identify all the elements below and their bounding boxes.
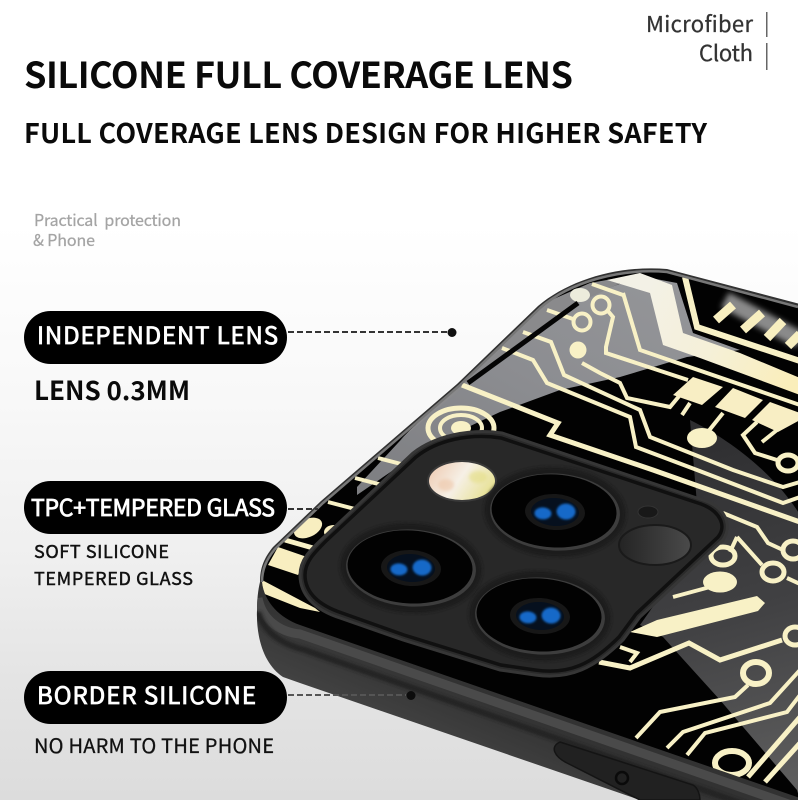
description line 2: TEMPERED GLASS <box>34 565 193 591</box>
note line 2: & Phone <box>33 227 95 251</box>
pill <box>24 481 287 534</box>
practical protection note <box>33 207 181 251</box>
flash <box>427 460 497 502</box>
connector line <box>288 694 406 696</box>
circuit traces <box>262 273 800 782</box>
edge reflection band <box>400 278 620 440</box>
callout: tpc tempered glass <box>24 481 318 591</box>
lens left <box>338 519 484 617</box>
bar upper <box>766 12 768 37</box>
pill text: BORDER SILICONE <box>37 676 256 711</box>
phone <box>256 268 800 800</box>
image edge strip <box>798 0 800 800</box>
pill text: TPC+TEMPERED GLASS <box>31 489 275 523</box>
description: LENS 0.3MM <box>34 371 190 408</box>
black reflection streak <box>468 303 578 383</box>
glass reflection right <box>640 420 800 800</box>
soft streak top right <box>725 300 800 340</box>
connector line <box>288 331 448 333</box>
callout: border silicone <box>24 671 416 759</box>
connector line <box>288 508 318 510</box>
description: NO HARM TO THE PHONE <box>34 730 274 759</box>
lens top <box>482 463 628 561</box>
side button <box>554 742 700 800</box>
cloth text: Cloth <box>699 36 753 68</box>
power icon <box>616 772 628 784</box>
module plate <box>305 436 722 671</box>
connector dot <box>448 328 456 337</box>
bumper bevel <box>258 598 800 800</box>
pill <box>24 311 287 364</box>
sensor <box>619 525 691 565</box>
subtitle: FULL COVERAGE LENS DESIGN FOR HIGHER SAFETY <box>24 112 707 151</box>
lens bottom <box>467 567 613 665</box>
pill text: INDEPENDENT LENS <box>37 316 278 351</box>
note line 1: Practical protection <box>34 207 181 231</box>
label: microfiber cloth <box>646 7 768 70</box>
bumper shadow line <box>256 610 740 800</box>
description line 1: SOFT SILICONE <box>34 538 169 564</box>
phone bumper <box>250 260 800 800</box>
glass reflection upper <box>357 276 740 495</box>
callout: independent lens <box>24 311 456 408</box>
microphone <box>638 506 658 518</box>
camera module <box>300 432 727 676</box>
pill <box>24 671 287 724</box>
module rim <box>300 432 727 676</box>
bar lower <box>766 43 768 70</box>
connector dot <box>406 691 416 700</box>
title: SILICONE FULL COVERAGE LENS <box>24 47 573 99</box>
microfiber text: Microfiber <box>646 7 753 39</box>
back glass with circuit pattern <box>250 260 800 800</box>
glass rim <box>262 271 798 582</box>
